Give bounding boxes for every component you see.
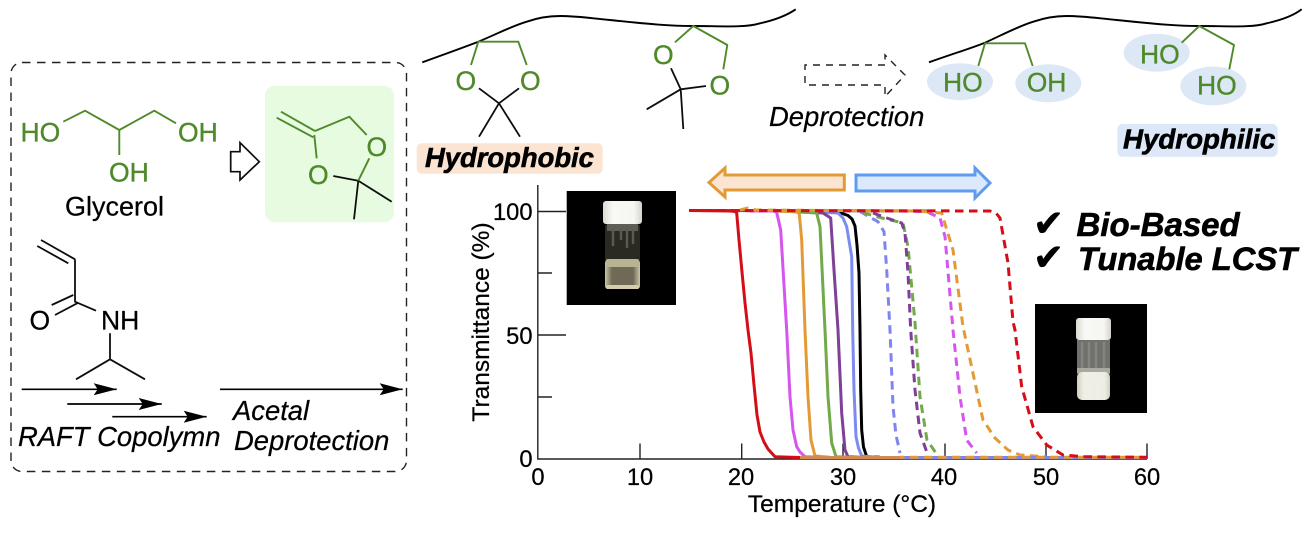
diol 2 (1140, 26, 1237, 100)
acetal ring 1: O (520, 66, 541, 96)
acetal ring 2: O (653, 40, 674, 70)
highlighted monomer: acetal (265, 86, 394, 222)
x axis tick labels: 10 (627, 465, 653, 491)
N-isopropylacrylamide structure (30, 240, 145, 379)
x axis tick labels: 60 (1134, 465, 1160, 491)
hydrophilic label: Hydrophilic (1123, 123, 1275, 154)
dashed panel border (11, 62, 406, 472)
callout: key features: Tunable LCST (1078, 240, 1300, 277)
acetal ring 1 (456, 42, 541, 137)
callout: key features: ✔ (1033, 236, 1064, 279)
y axis title: Transmittance (%) (468, 222, 495, 422)
x axis tick labels: 0 (531, 465, 545, 491)
arrow: RAFT step 1 (22, 388, 117, 390)
hydrophobic polymer (417, 9, 796, 174)
hydrophilic polymer (927, 9, 1302, 157)
x axis tick labels: 30 (830, 465, 856, 491)
y axis tick labels: 100 (493, 200, 532, 226)
arrow: acetal deprotection (220, 388, 403, 390)
data curves (689, 208, 1147, 458)
x axis tick labels: 20 (728, 465, 754, 491)
highlighted monomer: acetal: O (308, 160, 329, 190)
glycerol structure (20, 111, 218, 188)
callout: key features: Bio-Based (1076, 206, 1241, 243)
diol 1: OH (1027, 68, 1066, 98)
polymer backbone (929, 9, 1302, 62)
diol 1 (943, 43, 1066, 98)
panel: synthesis route (11, 62, 406, 472)
orange arrow: lower LCST (709, 168, 844, 197)
photo: clear solution vial (567, 191, 676, 305)
x axis tick labels (531, 465, 1160, 491)
y axis tick labels (493, 200, 532, 473)
callout: key features: ✔ (1033, 202, 1064, 245)
hollow arrow (231, 143, 259, 180)
N-isopropylacrylamide structure: NH (101, 305, 139, 335)
chart: transmittance vs temperature (468, 185, 1160, 518)
diol 2: HO (1140, 39, 1180, 69)
label: RAFT copolymerization: RAFT Copolymn (18, 421, 220, 452)
blue arrow: higher LCST (856, 168, 990, 198)
dashed deprotection arrow (805, 55, 905, 97)
photo: turbid solution vial (1035, 304, 1147, 413)
y axis tick labels: 50 (506, 324, 532, 350)
arrow: RAFT step 2 (67, 403, 162, 405)
hydroxyl highlights (927, 34, 1246, 106)
x axis title: Temperature (°C) (748, 491, 936, 518)
callout: key features (1033, 202, 1300, 279)
x axis tick labels: 50 (1033, 465, 1059, 491)
highlighted monomer: acetal: O (366, 132, 387, 162)
N-isopropylacrylamide structure: O (30, 305, 50, 335)
glycerol label: Glycerol (65, 192, 164, 222)
hydrophobic label: Hydrophobic (425, 142, 594, 173)
glycerol structure: HO (20, 118, 60, 148)
arrow: RAFT step 3 (112, 416, 207, 418)
x axis tick labels: 40 (931, 465, 957, 491)
glycerol structure: OH (178, 118, 218, 148)
polymer backbone (422, 9, 796, 62)
diol 1: HO (943, 68, 983, 98)
label: deprotection: Deprotection (769, 101, 924, 132)
glycerol structure: OH (109, 158, 149, 188)
y axis tick labels: 0 (519, 447, 532, 473)
diol 2: HO (1197, 70, 1237, 100)
acetal ring 2 (647, 26, 730, 129)
label: acetal deprotection: Acetal (231, 395, 310, 426)
label: acetal deprotection: Deprotection (234, 425, 389, 456)
axes and ticks (538, 185, 1147, 459)
acetal ring 2: O (710, 70, 730, 100)
acetal ring 1: O (456, 66, 476, 96)
